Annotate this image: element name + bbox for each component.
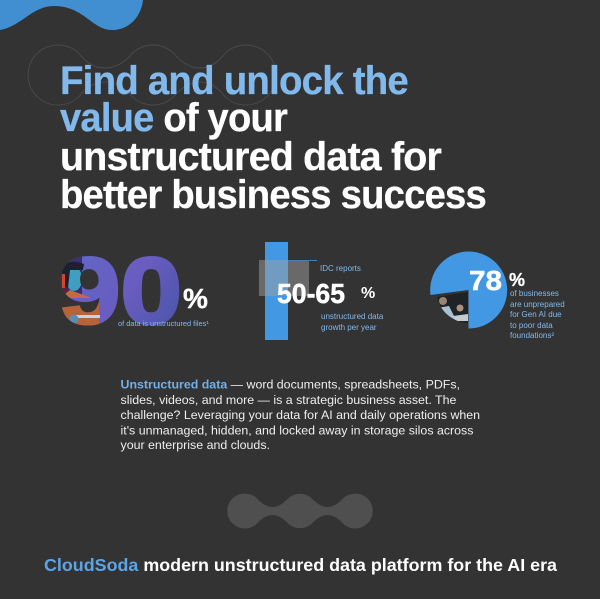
pie chart	[430, 252, 507, 329]
photo of person inside the nine	[61, 256, 100, 326]
big number: 50-65	[277, 278, 345, 309]
title: value of your	[60, 96, 287, 140]
big number: 78	[469, 265, 502, 296]
caption: unstructured data	[321, 312, 384, 321]
footer headline: CloudSoda modern unstructured data platform for the AI era	[44, 555, 557, 575]
percent sign: %	[509, 270, 525, 290]
description paragraph	[120, 378, 480, 452]
caption: foundations²	[510, 331, 554, 340]
caption: growth per year	[321, 323, 377, 332]
connector line	[288, 260, 317, 261]
percent sign: %	[183, 283, 208, 314]
description paragraph: your enterprise and clouds.	[120, 438, 270, 452]
top blob	[0, 0, 143, 30]
source label: IDC reports	[320, 264, 361, 273]
photo wedge	[437, 292, 468, 323]
translucent box	[259, 260, 309, 296]
title: unstructured data for	[60, 135, 441, 179]
stat: 50-65%	[259, 242, 384, 340]
big number 90: 90	[59, 238, 182, 343]
stat: 90%	[61, 256, 209, 326]
title	[60, 59, 486, 217]
caption: of businesses	[510, 289, 559, 298]
caption: to poor data	[510, 321, 553, 330]
title: Find and unlock the	[60, 59, 408, 103]
blue bar	[265, 242, 288, 340]
percent sign: %	[361, 285, 375, 302]
caption: are unprepared	[510, 300, 565, 309]
description paragraph: slides, videos, and more — is a strategic business asset. The	[120, 393, 456, 407]
stat: 78%	[430, 252, 565, 340]
title: better business success	[60, 173, 486, 217]
caption: for Gen AI due	[510, 310, 562, 319]
description paragraph: it's unmanaged, hidden, and locked away in storage silos across	[120, 424, 473, 438]
caption: of data is unstructured files¹	[118, 319, 209, 328]
chain of circles decoration	[227, 494, 373, 529]
outlined circles decoration	[28, 45, 276, 105]
description paragraph: challenge? Leveraging your data for AI and daily operations when	[120, 408, 480, 422]
description paragraph: Unstructured data — word documents, spreadsheets, PDFs,	[120, 378, 460, 392]
